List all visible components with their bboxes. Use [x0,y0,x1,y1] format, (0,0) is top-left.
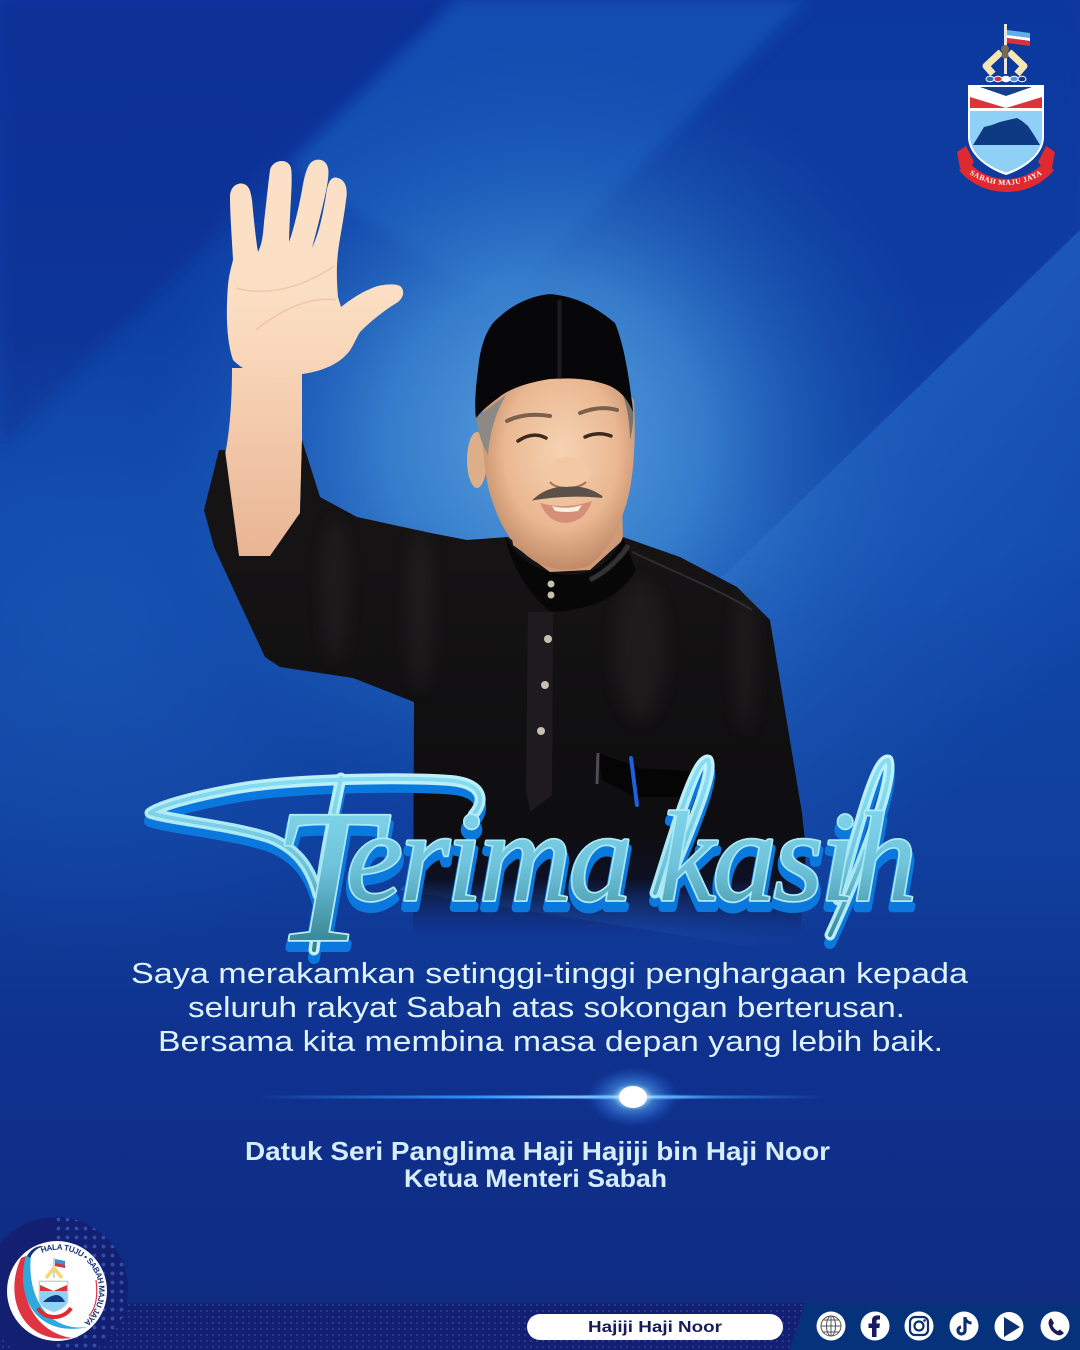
flag [1004,24,1007,74]
arms [986,52,1024,74]
icon: youtube play [994,1312,1024,1341]
ribbon [964,166,1049,186]
signature [245,1136,830,1193]
shirt [204,440,806,940]
portrait: man waving [204,160,806,940]
handle pill [527,1314,783,1340]
dotted sphere [0,1217,128,1350]
swooshes [14,1256,72,1339]
title shadow: erima kasih [346,794,914,936]
title: Terima kasih [150,760,914,990]
title shadow [150,768,914,990]
icon: raised hand [227,160,403,377]
icon: facebook [860,1312,890,1340]
arm [225,368,302,556]
beads [986,76,1026,82]
shield [968,85,1044,175]
icon: website globe [816,1312,846,1340]
icon: tiktok [950,1312,978,1340]
hair [476,395,506,455]
message text [131,958,969,1058]
buttons [537,580,554,735]
hat [475,294,633,418]
message text: Saya merakamkan setinggi-tinggi penghargaan kepada [131,958,969,990]
signature: Datuk Seri Panglima Haji Hajiji bin Haji Noor [245,1136,830,1166]
title swash strokes [150,760,889,950]
facial features [507,408,617,421]
icon: phone [1040,1312,1070,1340]
title lettering: erima kasih [346,786,914,928]
pocket and pen [598,753,708,797]
icon: instagram [904,1312,934,1340]
crest: state coat of arms [957,24,1055,192]
placket [526,612,553,812]
head [467,432,487,488]
shirt sheen [323,520,755,730]
badge: Hala Tuju Sabah Maju Jaya [0,1217,128,1348]
message text: seluruh rakyat Sabah atas sokongan berterusan. [188,992,905,1024]
crest: state coat of arms: SABAH MAJU JAYA [970,170,1042,186]
handle pill: Hajiji Haji Noor [588,1319,722,1336]
title lettering: T [273,772,390,982]
footer band [0,1303,1080,1350]
white disc [7,1241,107,1341]
mountain [973,118,1040,145]
light flare divider [255,1067,828,1127]
mini crest [38,1258,71,1317]
signature: Ketua Menteri Sabah [404,1165,667,1193]
title shadow: T [273,780,390,990]
message text: Bersama kita membina masa depan yang lebih baik. [158,1026,943,1058]
ring text: HALA TUJU • SABAH MAJU JAYA [40,1244,105,1326]
neck and collar [508,500,623,572]
